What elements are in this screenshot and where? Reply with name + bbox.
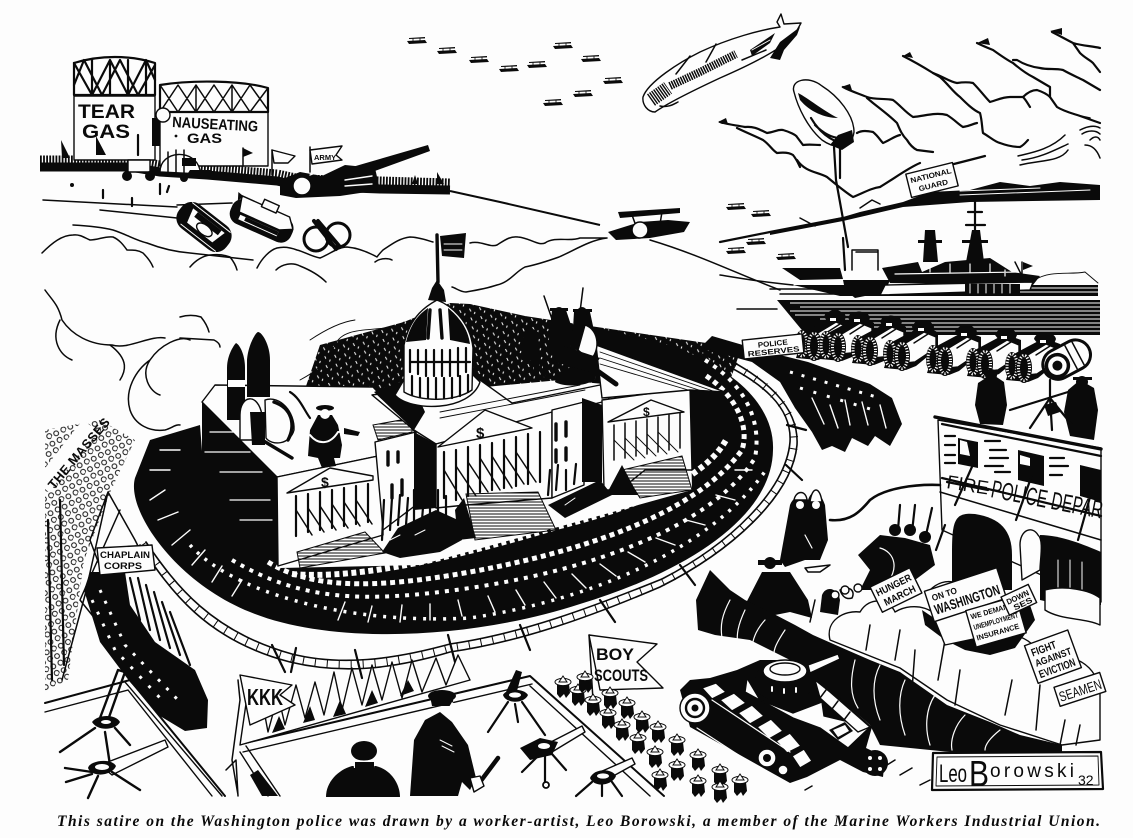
battleship bbox=[782, 200, 1098, 298]
centre wing bbox=[436, 412, 552, 508]
gas tank: nauseating gas bbox=[152, 82, 268, 166]
flag on dome bbox=[437, 233, 466, 282]
artist signature box: orowski bbox=[990, 761, 1074, 782]
sign: chaplain corps: CORPS bbox=[104, 561, 142, 571]
artist signature box bbox=[932, 752, 1103, 794]
capitol building bbox=[202, 345, 725, 568]
rear crowd behind capitol bbox=[300, 303, 740, 395]
national guard crowd on far hill bbox=[720, 182, 1100, 242]
gas tank: nauseating gas: GAS bbox=[187, 130, 222, 146]
turret bbox=[755, 665, 811, 702]
mounted police and rifle squads bbox=[745, 505, 945, 622]
bricks and windows bbox=[958, 438, 978, 468]
signage: FIRE bbox=[945, 472, 990, 500]
right roof rail bbox=[596, 345, 725, 398]
chaplain corps column bbox=[84, 572, 208, 731]
machine gun: centre tripod bbox=[488, 670, 545, 735]
boy scouts flag: SCOUTS bbox=[594, 666, 648, 685]
fire hose bbox=[830, 485, 940, 520]
gas tank: tear gas bbox=[61, 57, 155, 160]
rear wheel bbox=[862, 750, 888, 776]
black pillar right bbox=[582, 398, 602, 482]
tanks on hillside bbox=[171, 188, 350, 257]
banner: fight against eviction: FIGHT bbox=[1030, 639, 1058, 659]
banner: hunger march: MARCH bbox=[882, 584, 918, 609]
far hills bbox=[43, 183, 793, 290]
the masses crowd: THE MASSES bbox=[45, 415, 113, 492]
boy scouts flag: BOY bbox=[596, 645, 635, 664]
foreground frame lines bbox=[45, 676, 664, 796]
crowd on left ridge bbox=[40, 163, 600, 225]
banner: we demand unemployment insurance: WE DEMAND bbox=[969, 600, 1015, 621]
klan hoods and banner bbox=[226, 655, 470, 796]
water with horizontal lines bbox=[737, 285, 1100, 335]
smoke and marchers bbox=[829, 582, 1100, 745]
capitol building: $ bbox=[476, 425, 485, 442]
barbed wire fence bbox=[62, 348, 806, 680]
klan hoods and banner: KKK bbox=[247, 684, 283, 710]
rooftop wall bbox=[373, 418, 412, 440]
observation balloon bbox=[793, 80, 854, 247]
banner: hunger march bbox=[870, 568, 922, 612]
fire police department building bbox=[935, 417, 1105, 608]
sign: police reserves bbox=[742, 334, 804, 359]
artillery gun and army flags on ridge: ARMY bbox=[314, 153, 336, 162]
air squadrons bbox=[407, 37, 796, 260]
banner: fight against eviction: EVICTION bbox=[1037, 657, 1077, 681]
artist signature box: 32 bbox=[1078, 772, 1094, 788]
left track plates bbox=[702, 683, 726, 699]
crowds of riflemen at capitol steps bbox=[382, 464, 612, 558]
capitol dome bbox=[395, 280, 480, 406]
armored tank in foreground bbox=[680, 654, 930, 790]
gas tank: tear gas: TEAR bbox=[78, 102, 135, 123]
gas cylinders and policeman with hose bbox=[227, 332, 360, 468]
capitol building: $ bbox=[643, 405, 650, 419]
banner: on to washington: WASHINGTON bbox=[932, 581, 1002, 618]
sign: police reserves: POLICE bbox=[757, 337, 788, 350]
left wing roof bbox=[202, 385, 415, 477]
capitol building: $ bbox=[321, 474, 329, 490]
banner: down: DOWN bbox=[1005, 588, 1031, 607]
artist signature box: Leo bbox=[939, 760, 967, 788]
machine gun: centre right bbox=[520, 726, 585, 788]
banner: down bbox=[1001, 584, 1037, 615]
hull bbox=[745, 678, 870, 748]
police with machine gun on roof bbox=[975, 369, 1098, 440]
centre steps bbox=[466, 492, 556, 540]
boy scouts troop bbox=[555, 671, 748, 803]
roof behind centre bbox=[372, 380, 610, 444]
drifting smoke clouds bbox=[42, 235, 607, 430]
police reserve column bbox=[700, 336, 902, 452]
left wing dark side bbox=[202, 402, 278, 566]
left steps bbox=[297, 532, 385, 568]
banner: hunger march: HUNGER bbox=[875, 572, 914, 599]
left pediment bbox=[287, 468, 373, 493]
rollers bbox=[680, 693, 710, 723]
gas tank: tear gas: GAS bbox=[82, 122, 130, 143]
banner: fight against eviction bbox=[1024, 630, 1081, 683]
left wing front bbox=[277, 455, 383, 566]
machine gun: upper left bbox=[60, 670, 130, 765]
banner: we demand unemployment insurance: UNEMPLOYMENT bbox=[972, 610, 1019, 632]
artist signature box: B bbox=[969, 753, 989, 794]
banner: seamen: SEAMEN bbox=[1057, 676, 1104, 705]
sign: national guard: GUARD bbox=[918, 177, 950, 193]
banner: down: SES bbox=[1012, 595, 1035, 612]
sign: chaplain corps: CHAPLAIN bbox=[100, 550, 150, 560]
caption: This satire on the Washington police was drawn by a worker-artist, Leo Borowski, a member of the Marine Workers Industrial Union. bbox=[57, 813, 1100, 830]
artillery gun and army flags on ridge bbox=[243, 145, 444, 198]
zeppelin bbox=[643, 14, 801, 112]
banner: fight against eviction: AGAINST bbox=[1034, 646, 1073, 670]
banner: on to washington: ON TO bbox=[930, 585, 958, 603]
gas tank: nauseating gas: NAUSEATING bbox=[172, 114, 259, 135]
right connector bbox=[552, 402, 584, 498]
smoke trails on right bbox=[718, 28, 1100, 197]
sign: national guard: NATIONAL bbox=[909, 166, 953, 185]
sign: national guard bbox=[906, 163, 958, 197]
two helmeted policemen bbox=[780, 490, 830, 572]
foreground policeman: seen from behind bbox=[326, 741, 400, 797]
arches bbox=[952, 514, 1012, 590]
machine gun: bottom right bbox=[576, 758, 635, 796]
sign: chaplain corps bbox=[97, 545, 155, 575]
black pillar bbox=[414, 432, 436, 510]
machine gun: lower left bbox=[65, 740, 168, 798]
sign: police reserves: RESERVES bbox=[747, 344, 800, 359]
police ring around the capitol bbox=[134, 326, 773, 634]
left connector with windows bbox=[375, 432, 416, 530]
soldiers and cannon on roof bbox=[522, 288, 616, 385]
boy scouts flag bbox=[589, 635, 663, 700]
foreground police officer with baton bbox=[410, 690, 498, 796]
banner: on to washington bbox=[924, 568, 1007, 622]
trucks at tank base bbox=[122, 150, 212, 182]
police line in lower right bbox=[696, 570, 1062, 752]
banner: we demand unemployment insurance: INSURANCE bbox=[976, 622, 1020, 642]
banner: we demand unemployment insurance bbox=[966, 596, 1026, 647]
row of tanks bbox=[795, 310, 1096, 385]
policeman bbox=[308, 415, 342, 468]
the masses crowd bbox=[35, 415, 135, 692]
biplane bbox=[608, 208, 690, 240]
right wing bbox=[602, 388, 692, 490]
